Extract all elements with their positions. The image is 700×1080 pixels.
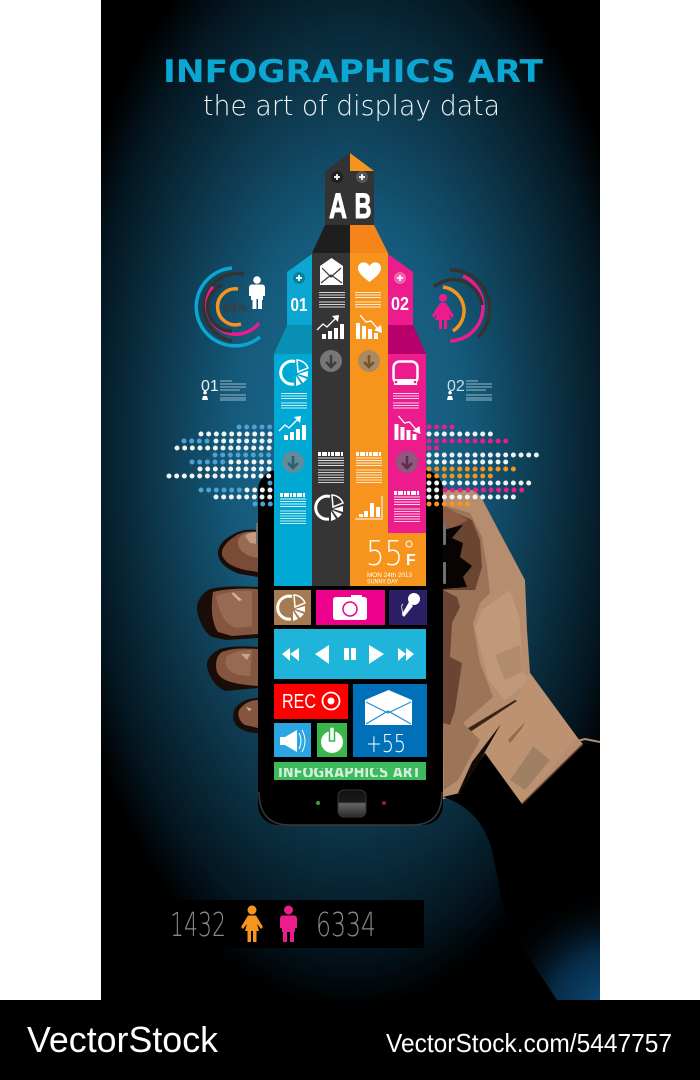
icon: open envelope <box>320 258 343 285</box>
subtitle: the art of display data <box>203 89 500 122</box>
tile: microphone <box>389 590 427 625</box>
right ring chart <box>434 270 490 341</box>
black sleeve <box>443 739 600 1000</box>
icon: heart <box>358 262 381 282</box>
left hand fingers <box>197 530 258 733</box>
tile: mail +55: +55 <box>366 729 406 758</box>
smartphone body <box>256 470 446 825</box>
tile: speaker <box>274 723 311 757</box>
status led red <box>382 801 386 805</box>
weather tile <box>366 534 416 586</box>
column: dark gray <box>312 253 350 586</box>
column: orange <box>350 253 426 586</box>
small bar chart <box>355 496 382 519</box>
letter B: B <box>354 187 372 226</box>
weather tile: 55 <box>366 534 403 574</box>
footer bar <box>0 1000 700 1080</box>
icon: tv <box>394 362 418 385</box>
left ring chart <box>196 268 260 346</box>
bottom statistics bar <box>110 900 424 948</box>
status led green <box>316 801 320 805</box>
label 01 <box>201 378 246 400</box>
icon: woman pink <box>432 294 454 329</box>
letter A: A <box>329 187 347 226</box>
stat 1432: 1432 <box>170 905 226 944</box>
tile: green strip text: INFOGRAPHICS ART <box>278 763 421 783</box>
tile: rec <box>274 684 348 719</box>
icon: man pink <box>280 906 297 942</box>
rocket-shaped chart header <box>312 153 388 253</box>
tile: power <box>317 723 347 757</box>
tile: green strip text <box>274 762 426 780</box>
column: blue tab with 01: 01 <box>290 295 308 315</box>
footer brand: VectorStock <box>27 1019 219 1060</box>
dot map left side <box>169 427 273 504</box>
weather tile: F <box>406 552 416 569</box>
weather tile: SUNNY DAY <box>367 578 399 586</box>
footer image id: VectorStock.com/5447757 <box>386 1028 672 1058</box>
dark blue radial poster background <box>101 0 600 1000</box>
right hand <box>440 490 583 804</box>
icon: man white <box>249 276 265 309</box>
home button <box>338 790 366 817</box>
hand shading <box>443 505 493 730</box>
left ring chart: 63% <box>223 301 247 315</box>
title: INFOGRAPHICS ART <box>163 54 543 90</box>
column: pink tab with 02 <box>388 254 426 533</box>
tile: mail +55 <box>353 684 427 758</box>
label 01: 01 <box>201 378 219 395</box>
column: blue tab with 01 <box>274 254 312 586</box>
weather tile: MON 24th 2013 <box>367 572 412 579</box>
label 02 <box>447 378 492 400</box>
column: pink tab with 02: 02 <box>391 294 409 314</box>
tile: rec: REC <box>282 691 316 713</box>
icon: woman orange <box>241 906 263 942</box>
dot map right side <box>429 427 539 504</box>
tile: camera <box>316 590 385 625</box>
stat 6334: 6334 <box>316 905 376 944</box>
tile: media player controls <box>274 629 426 679</box>
label 02: 02 <box>447 378 465 395</box>
tile: brown pie chart <box>274 590 311 625</box>
